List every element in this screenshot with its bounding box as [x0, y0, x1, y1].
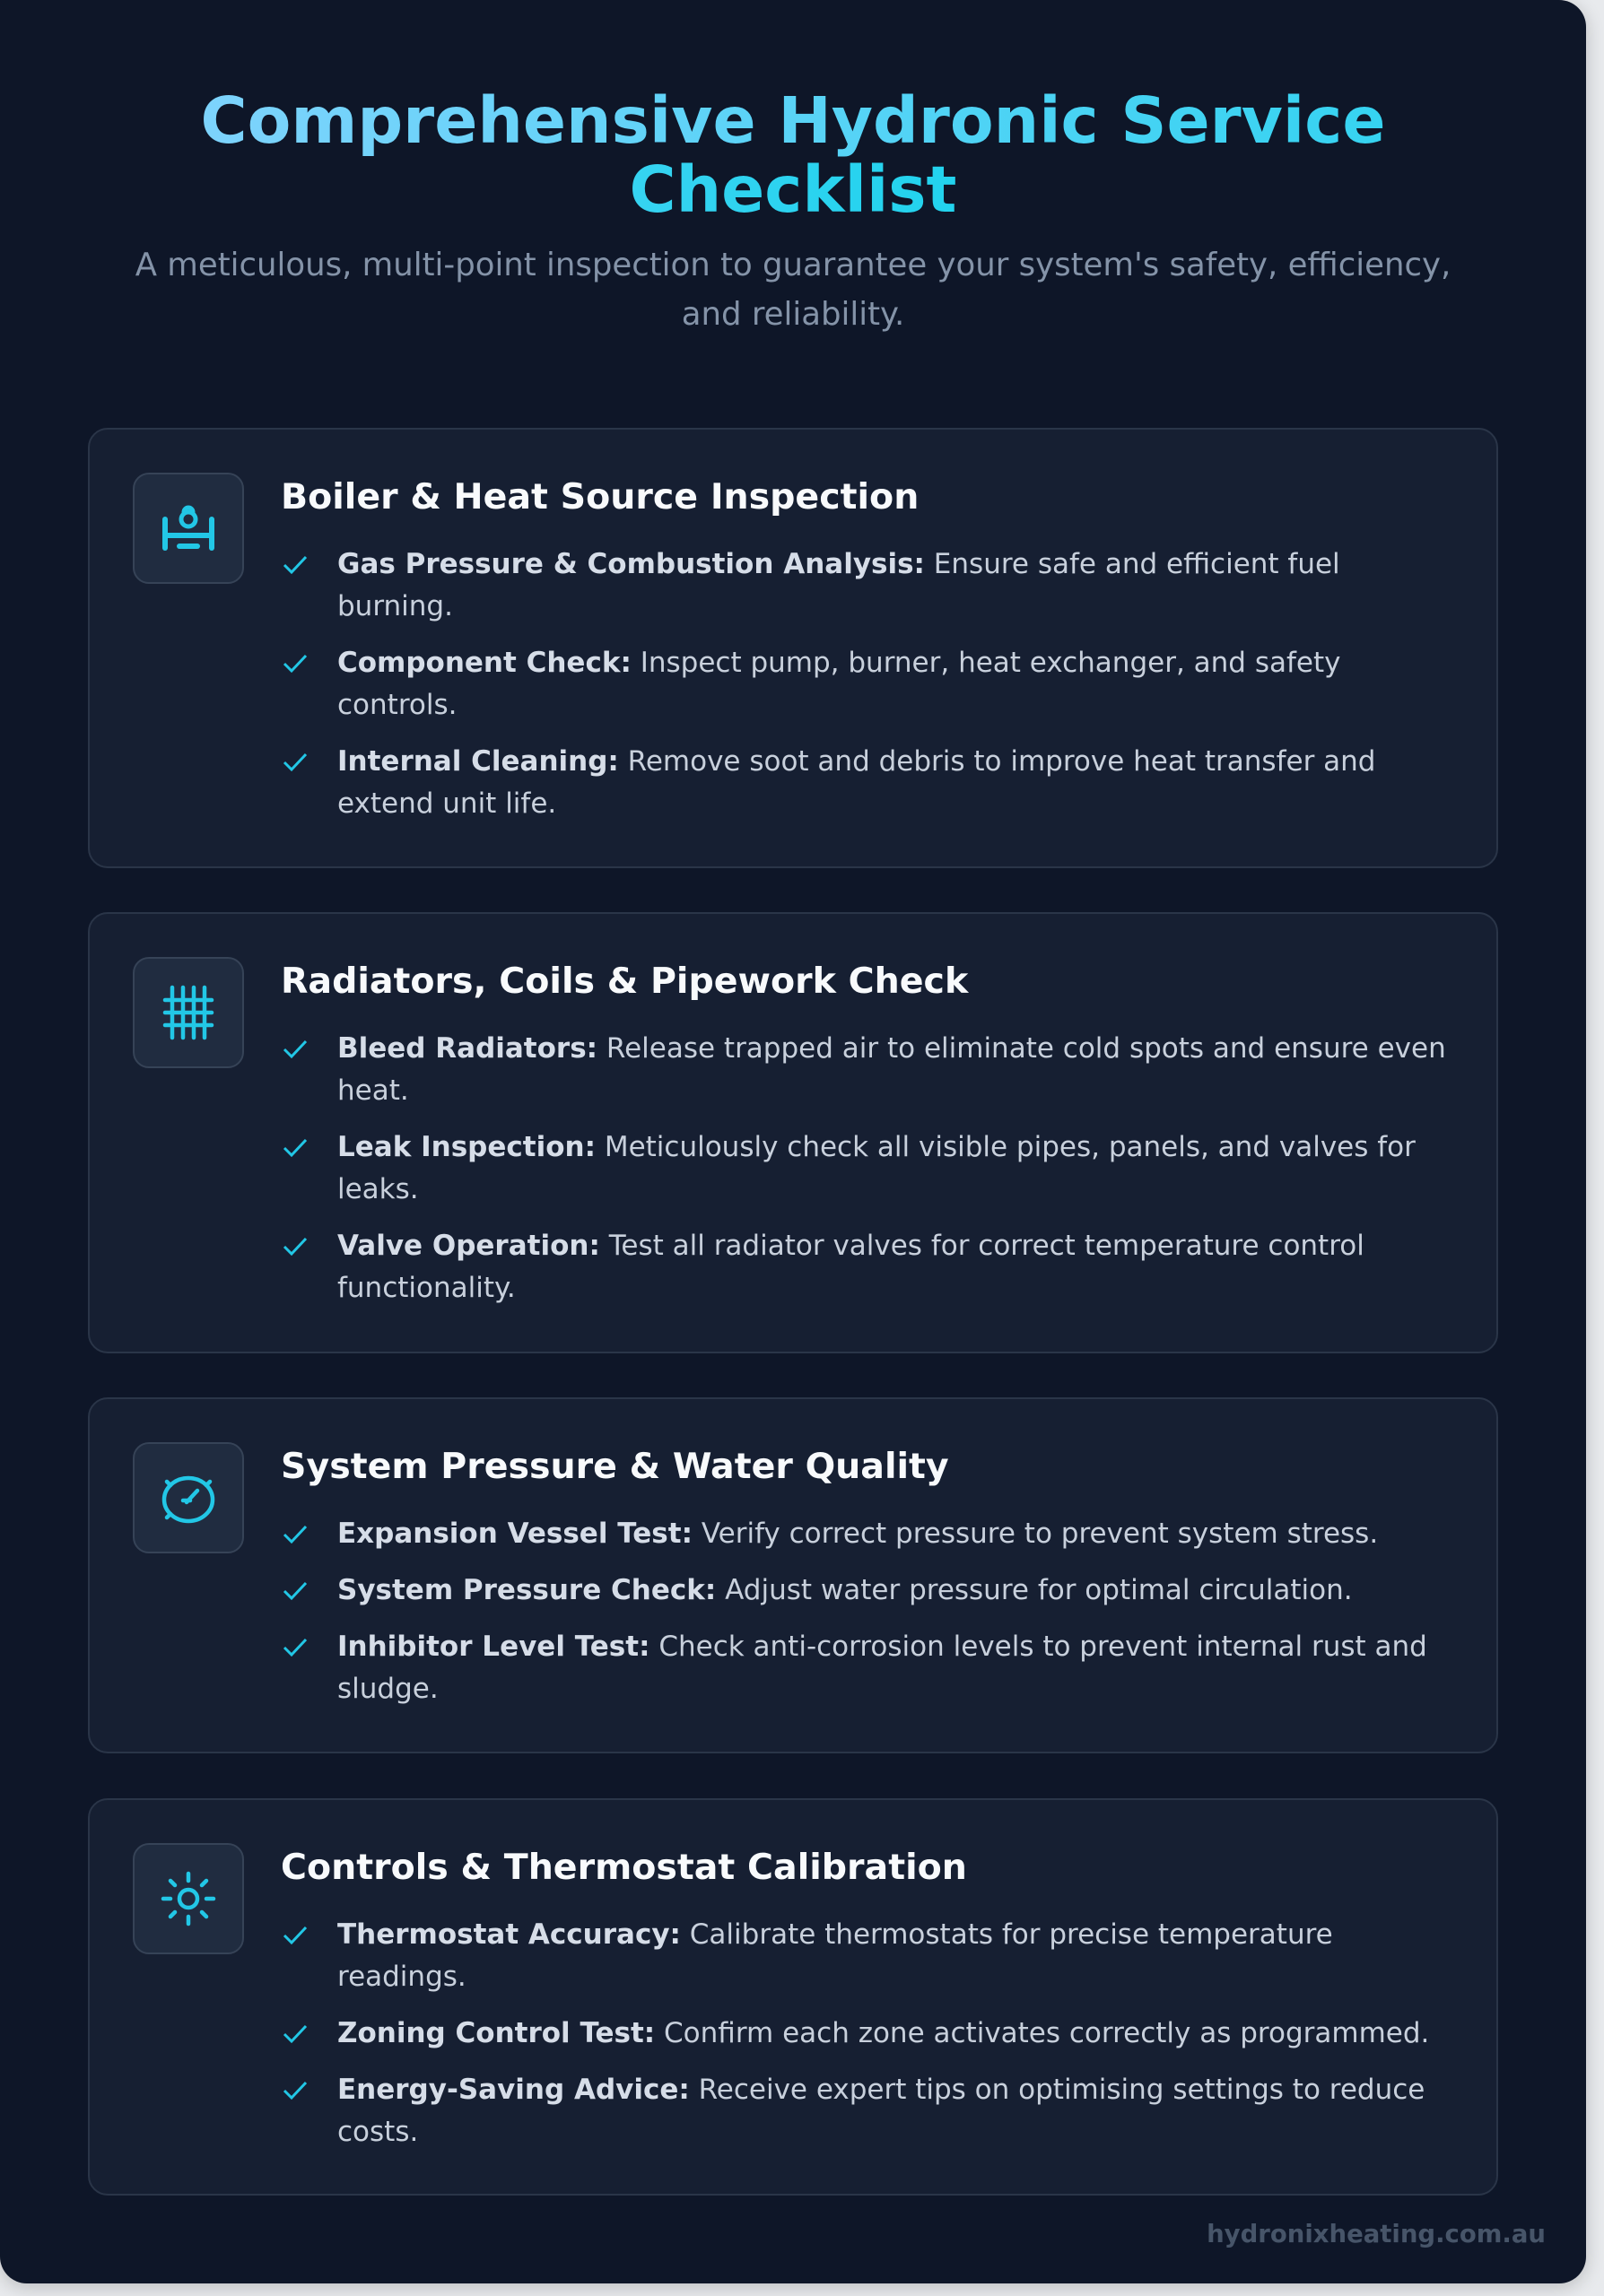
icon: gauge — [133, 1442, 244, 1553]
list — [283, 1032, 1446, 1304]
heading: System Pressure & Water Quality — [281, 1446, 949, 1487]
list: Energy-Saving Advice: Receive expert tips on optimising settings to reduce costs. — [337, 2074, 1425, 2148]
list: Zoning Control Test: Confirm each zone activates correctly as programmed. — [337, 2017, 1429, 2049]
icon: boiler — [133, 473, 244, 584]
list: Inhibitor Level Test: Check anti-corrosion levels to prevent internal rust and sludge. — [337, 1631, 1427, 1705]
title: Checklist — [630, 152, 956, 227]
list: Gas Pressure & Combustion Analysis: Ensure safe and efficient fuel burning. — [337, 548, 1340, 622]
title: Comprehensive Hydronic Service — [200, 83, 1386, 158]
panel: pressure — [88, 1397, 1498, 1753]
panel: boiler — [88, 428, 1498, 868]
list: Leak Inspection: Meticulously check all visible pipes, panels, and valves for leaks. — [337, 1131, 1416, 1205]
list — [283, 548, 1376, 820]
list: Bleed Radiators: Release trapped air to eliminate cold spots and ensure even heat. — [337, 1032, 1446, 1107]
list: Component Check: Inspect pump, burner, heat exchanger, and safety controls. — [337, 647, 1340, 721]
list: Expansion Vessel Test: Verify correct pressure to prevent system stress. — [337, 1518, 1378, 1550]
title — [200, 83, 1386, 227]
heading: Boiler & Heat Source Inspection — [281, 476, 919, 517]
panel: controls — [88, 1798, 1498, 2196]
footer: hydronixheating.com.au — [1207, 2220, 1546, 2248]
list: Internal Cleaning: Remove soot and debris to improve heat transfer and extend unit life. — [337, 745, 1376, 820]
list — [283, 1918, 1429, 2148]
subtitle: A meticulous, multi-point inspection to guarantee your system's safety, efficiency, and reliability. — [135, 247, 1451, 333]
list: Thermostat Accuracy: Calibrate thermostats for precise temperature readings. — [337, 1918, 1333, 1993]
list: System Pressure Check: Adjust water pressure for optimal circulation. — [337, 1574, 1353, 1606]
icon: radiator — [133, 957, 244, 1068]
heading: Radiators, Coils & Pipework Check — [281, 961, 968, 1002]
list — [283, 1518, 1427, 1705]
list: Valve Operation: Test all radiator valves for correct temperature control functionality. — [337, 1230, 1364, 1304]
icon: sun/settings — [133, 1843, 244, 1954]
heading: Controls & Thermostat Calibration — [281, 1847, 967, 1888]
panel: radiators — [88, 912, 1498, 1353]
